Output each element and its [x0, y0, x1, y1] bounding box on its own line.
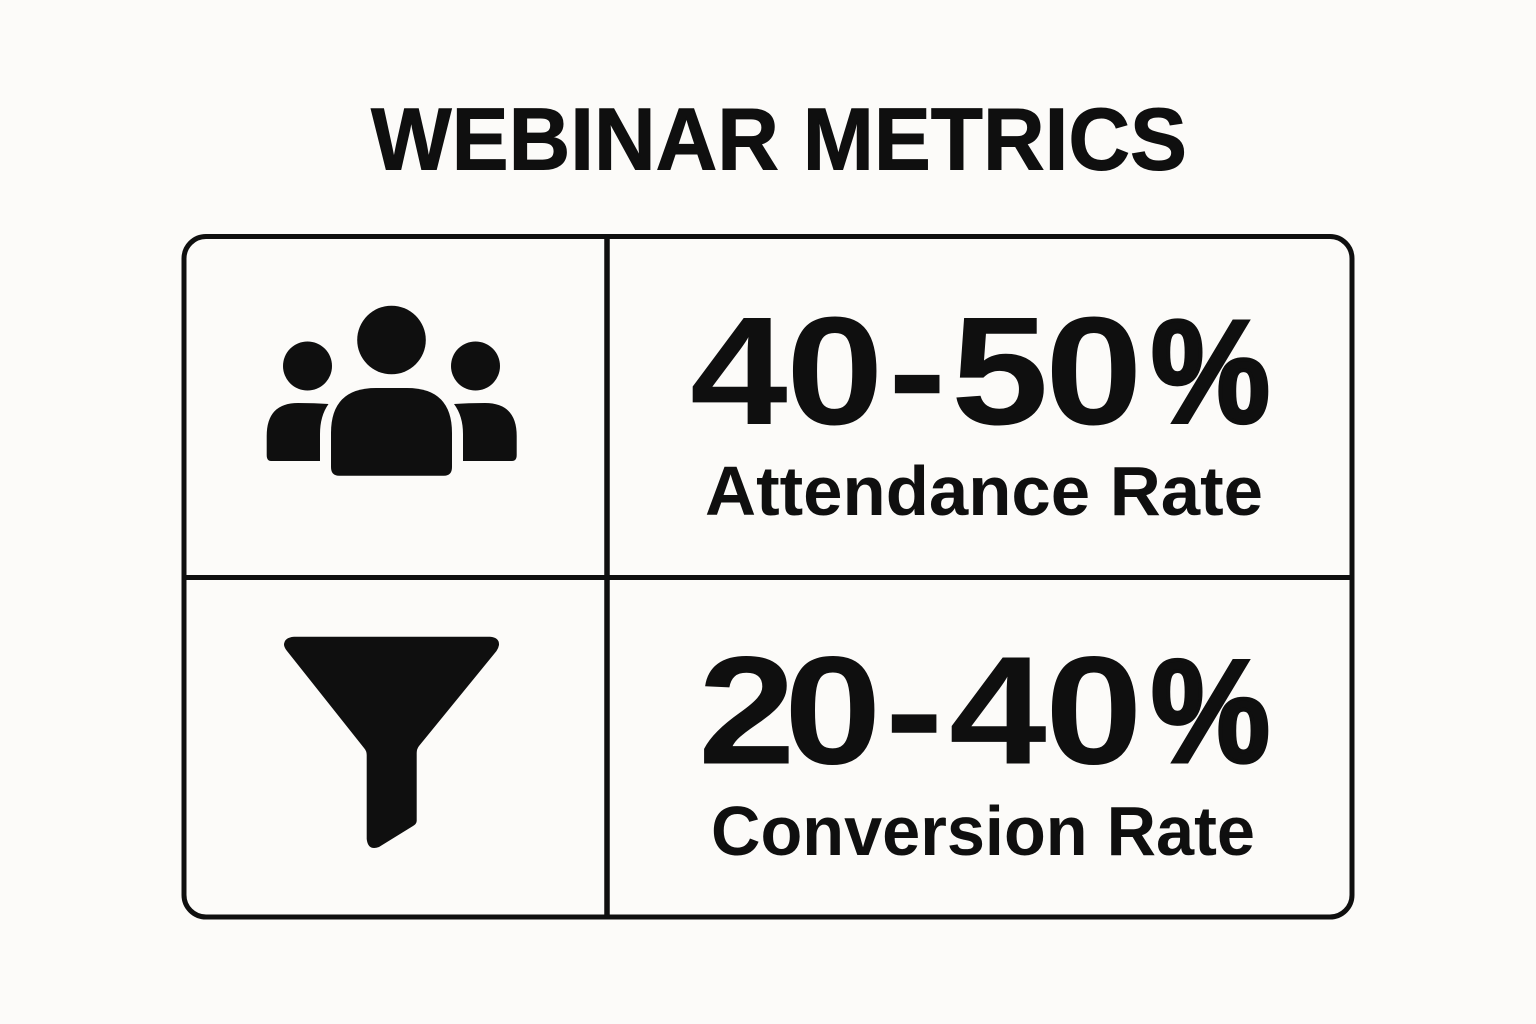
- icon: audience group: [267, 306, 517, 476]
- conversion label: Conversion Rate: [711, 792, 1255, 870]
- icon: funnel: [284, 637, 499, 848]
- attendance label: Attendance Rate: [705, 452, 1263, 530]
- title: WEBINAR METRICS: [371, 90, 1187, 188]
- attendance value: %: [1151, 290, 1270, 453]
- conversion value: %: [1151, 630, 1270, 792]
- metrics table: [184, 236, 1352, 917]
- conversion value: 20-40: [698, 625, 1143, 796]
- attendance value: 40-50: [690, 285, 1143, 457]
